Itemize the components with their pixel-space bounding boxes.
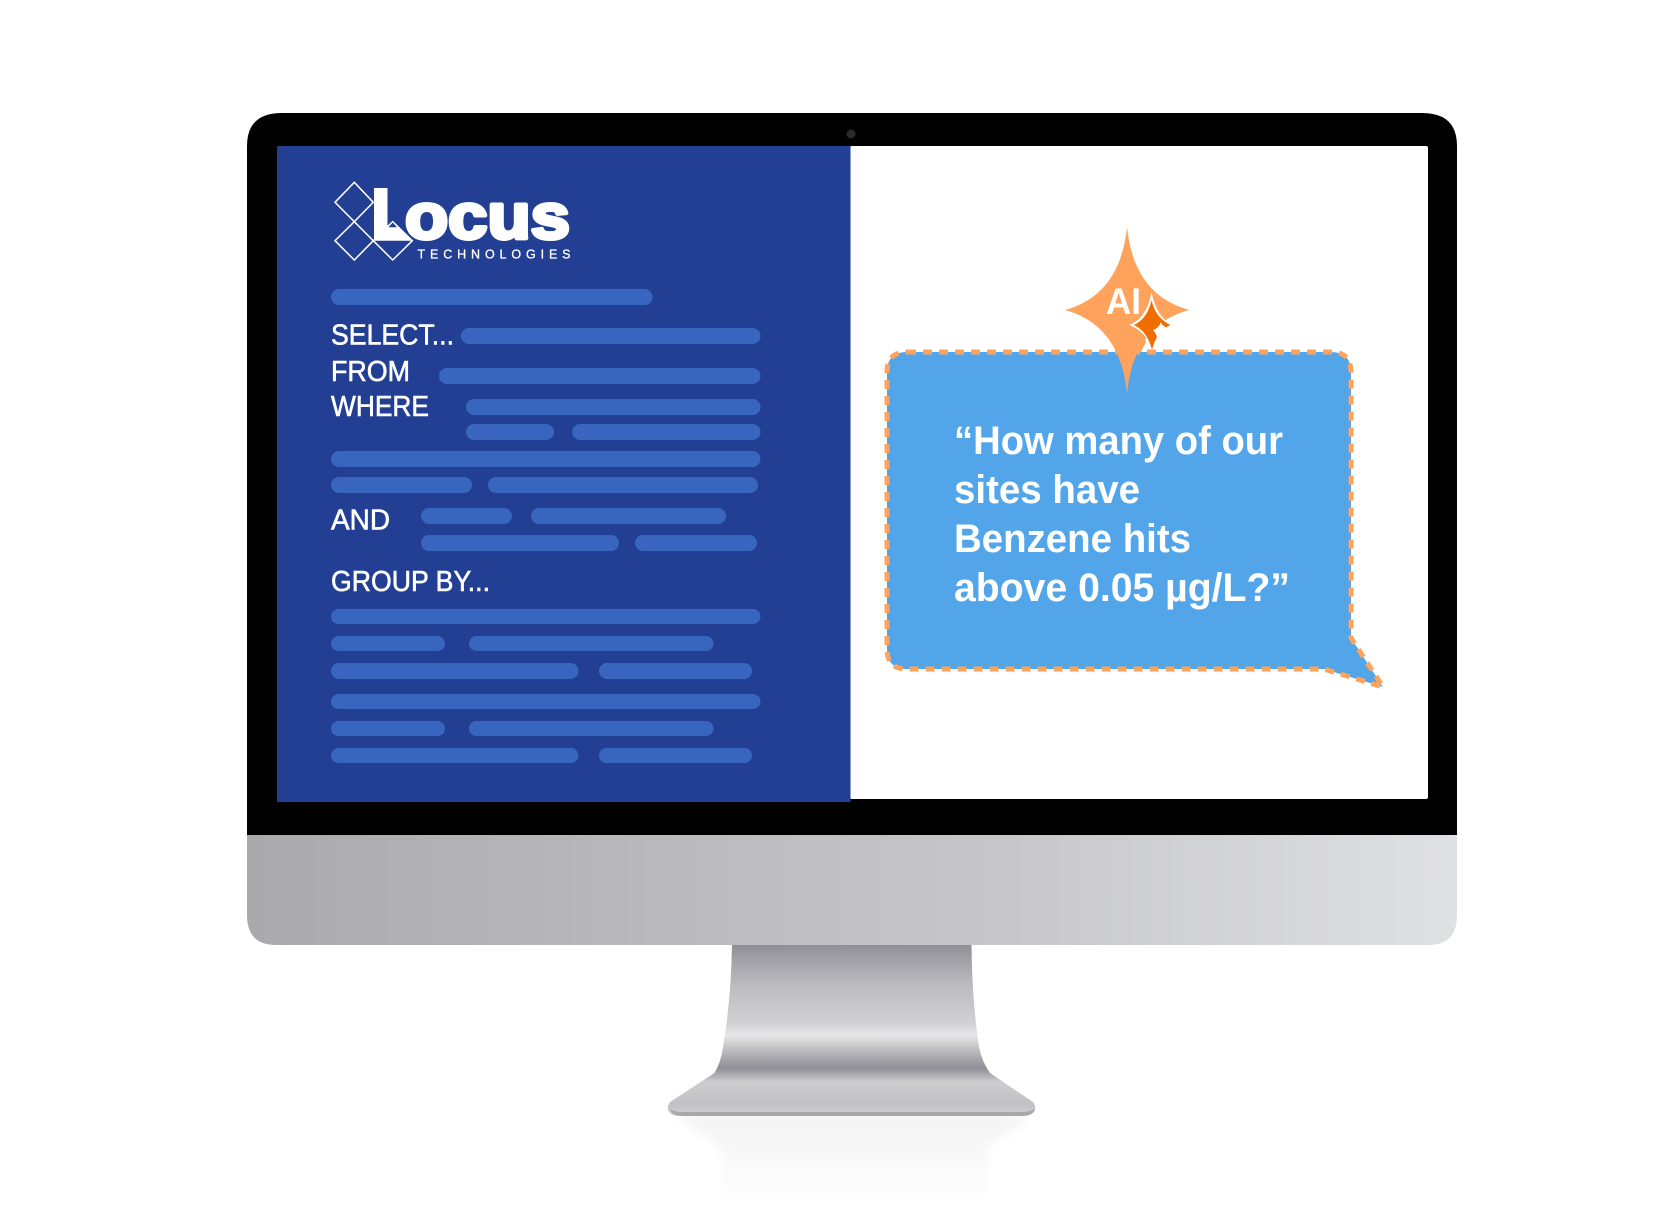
- question text: above 0.05 µg/L?”: [954, 566, 1290, 610]
- SQL keywords: [331, 320, 490, 598]
- SQL keywords: WHERE: [331, 391, 429, 423]
- SQL keywords: SELECT...: [331, 320, 454, 352]
- logo: Locus Technologies: [335, 181, 570, 262]
- screen: right white area: [850, 146, 1428, 799]
- stand reflection: [675, 1116, 1032, 1208]
- SQL keywords: GROUP BY...: [331, 566, 490, 598]
- question text: [954, 419, 1290, 610]
- logo: Locus Technologies: ocus: [405, 181, 570, 253]
- icon: AI sparkle: AI: [1106, 281, 1141, 322]
- SQL keywords: AND: [331, 504, 390, 536]
- question text: “How many of our: [954, 419, 1283, 463]
- monitor bezel: [247, 113, 1457, 835]
- question text: sites have: [954, 468, 1140, 512]
- monitor chin: [247, 835, 1457, 945]
- icon: AI sparkle: [1065, 227, 1189, 393]
- logo: Locus Technologies: TECHNOLOGIES: [418, 248, 570, 262]
- monitor stand: [668, 945, 1035, 1116]
- question text: Benzene hits: [954, 517, 1191, 561]
- panel: SQL query: [277, 146, 850, 802]
- placeholder query bars: [331, 289, 760, 763]
- chat bubble: [887, 352, 1383, 687]
- SQL keywords: FROM: [331, 356, 410, 388]
- webcam: [846, 130, 856, 138]
